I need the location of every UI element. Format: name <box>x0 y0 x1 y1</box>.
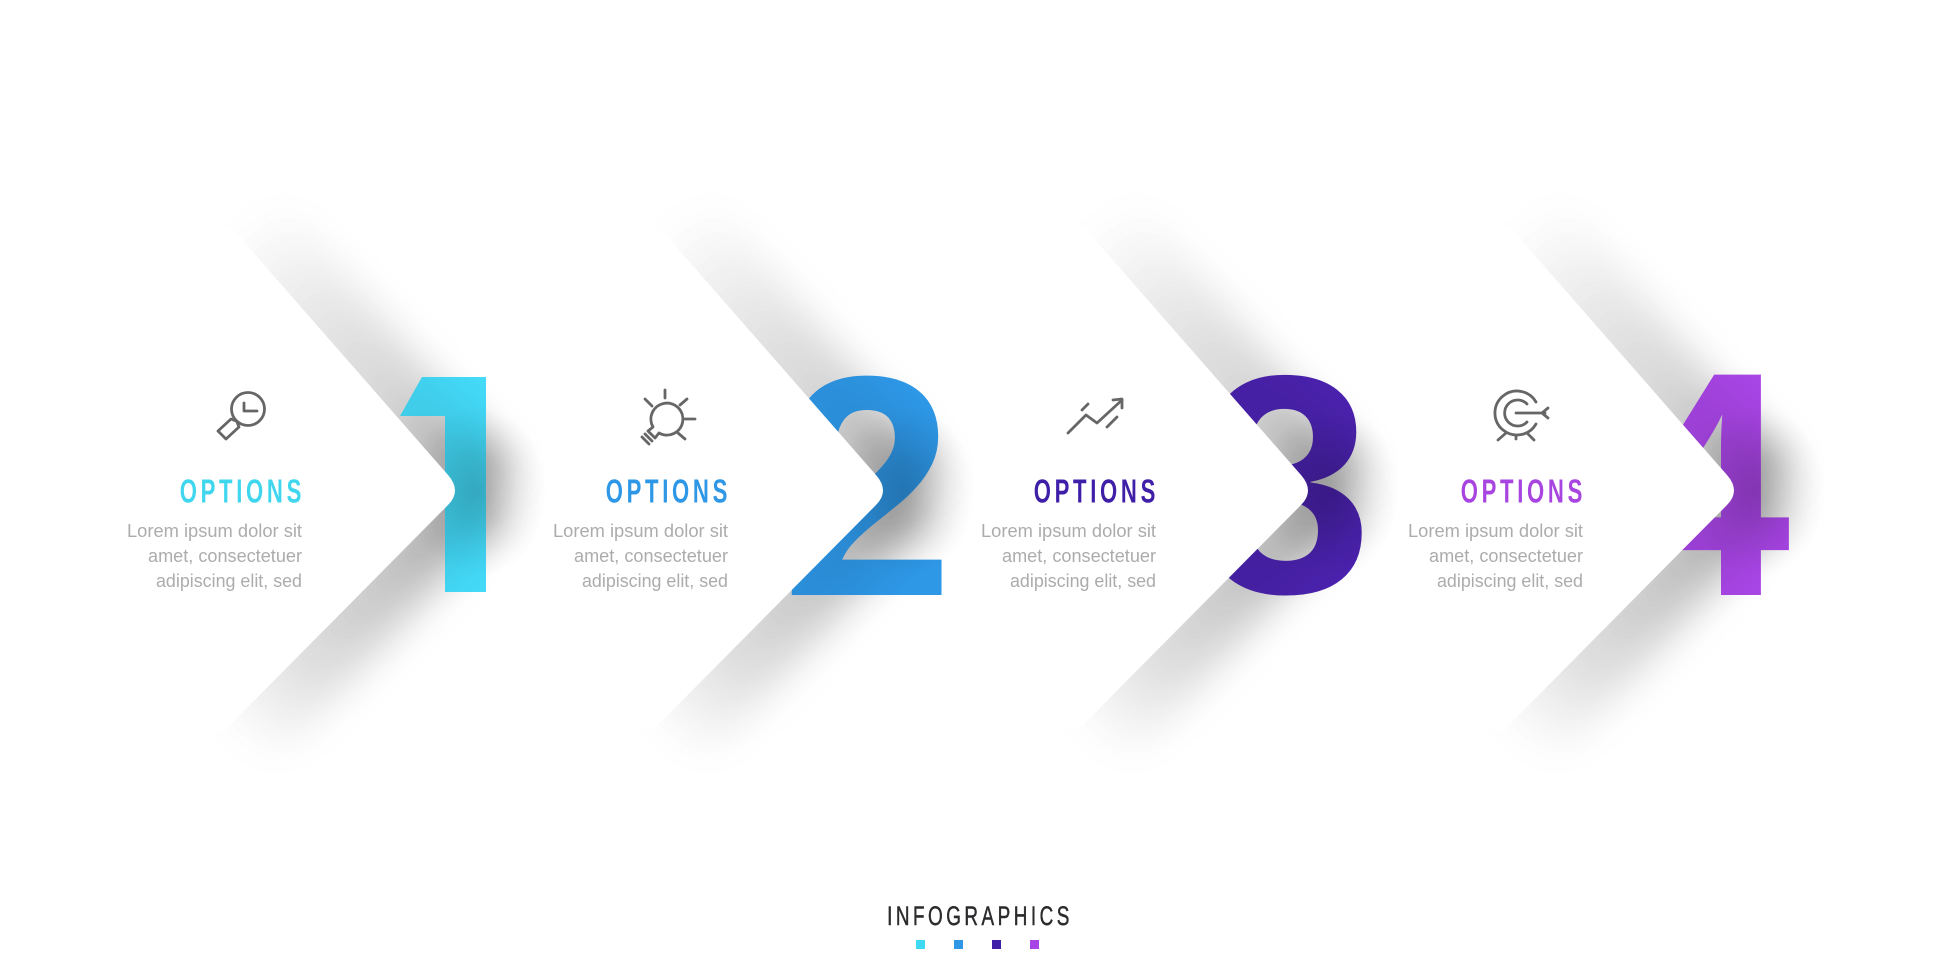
shadow behind number 3 <box>1045 206 1365 751</box>
heading: options 2: OPTIONS <box>606 473 731 510</box>
text block 2: amet, consectetuer <box>574 545 728 566</box>
text block 2: Lorem ipsum dolor sit <box>553 520 728 541</box>
number 3: 3 <box>1200 310 1373 658</box>
text block 4: Lorem ipsum dolor sit <box>1408 520 1583 541</box>
arrow 4 with shading <box>1441 206 1826 751</box>
arrow 3 with shading <box>1015 206 1400 751</box>
text block 2 <box>553 520 728 591</box>
text block 1: amet, consectetuer <box>148 545 302 566</box>
arrow 1 with shading <box>162 206 547 751</box>
text block 4: amet, consectetuer <box>1429 545 1583 566</box>
text block 4 <box>1408 520 1583 591</box>
text block 1: adipiscing elit, sed <box>156 570 302 591</box>
text block 1 <box>127 520 302 591</box>
text block 3: adipiscing elit, sed <box>1010 570 1156 591</box>
number 1: 1 <box>400 310 573 658</box>
text block 1: Lorem ipsum dolor sit <box>127 520 302 541</box>
icon: trend arrow <box>1068 399 1122 433</box>
shadow behind number 2 <box>620 206 940 751</box>
heading: options 3: OPTIONS <box>1034 473 1159 510</box>
heading: options 1: OPTIONS <box>180 473 305 510</box>
icon: target with arrow <box>1495 391 1548 440</box>
colour legend squares <box>916 940 1039 949</box>
icon: light bulb <box>642 390 695 444</box>
text block 2: adipiscing elit, sed <box>582 570 728 591</box>
text block 3: amet, consectetuer <box>1002 545 1156 566</box>
number 1 <box>400 377 486 592</box>
shadow behind number 4 <box>1471 206 1791 751</box>
text block 3 <box>981 520 1156 591</box>
shadow behind number 1 <box>192 206 512 751</box>
text block 4: adipiscing elit, sed <box>1437 570 1583 591</box>
icon: magnifier with clock <box>218 392 264 439</box>
heading: options 4: OPTIONS <box>1461 473 1586 510</box>
title: infographics: INFOGRAPHICS <box>887 901 1073 931</box>
number 4: 4 <box>1621 306 1792 664</box>
number 2: 2 <box>781 312 954 662</box>
text block 3: Lorem ipsum dolor sit <box>981 520 1156 541</box>
arrow 2 with shading <box>590 206 975 751</box>
